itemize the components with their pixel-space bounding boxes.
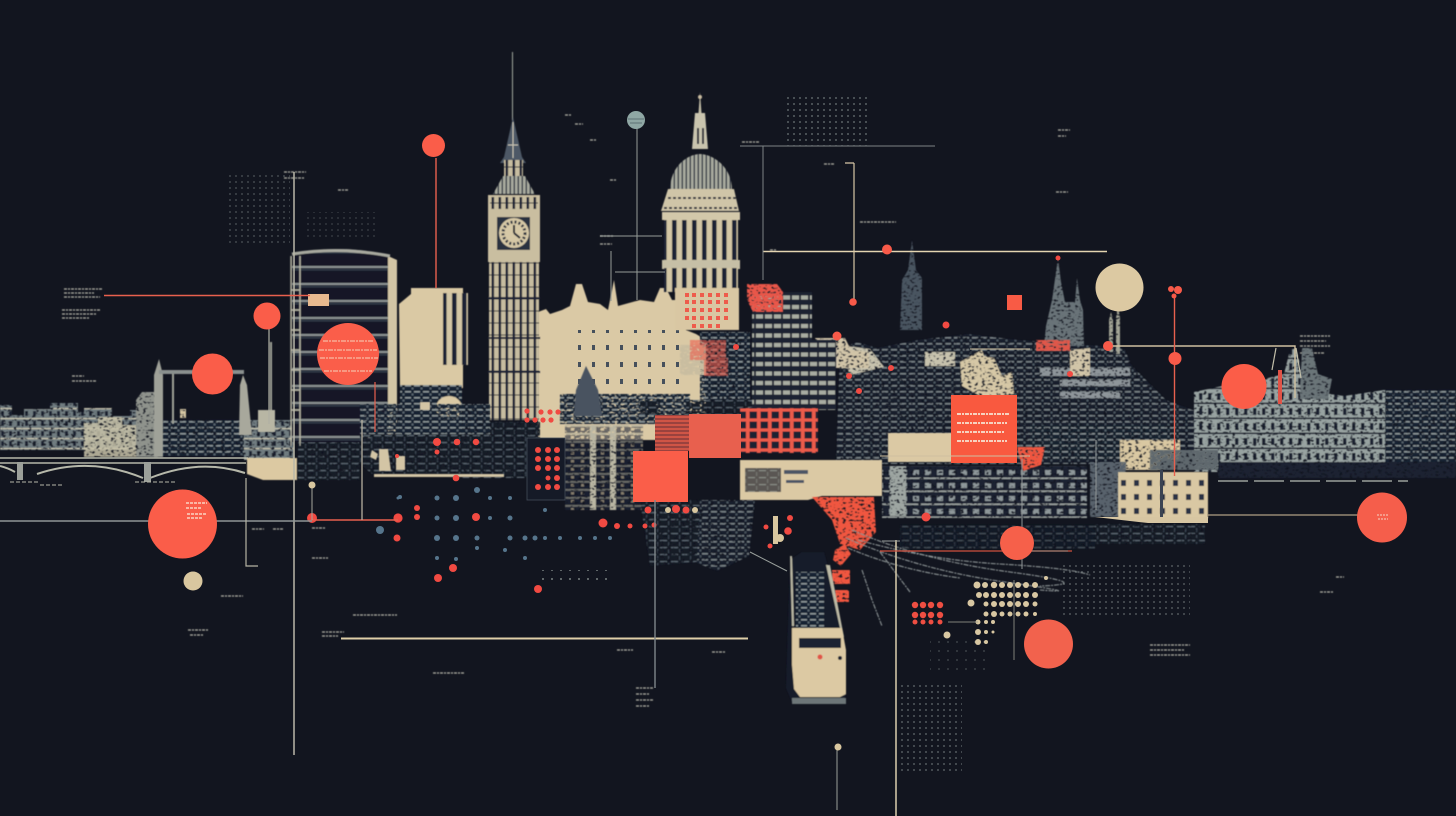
circle: coral far-right marker <box>1357 492 1407 542</box>
circle: coral lower marker <box>1024 620 1073 668</box>
red grid building <box>740 408 818 453</box>
cream embankment block <box>247 458 297 480</box>
red roof strip <box>1036 340 1070 351</box>
scattered data dots <box>307 256 1073 593</box>
circle: grey-blue top pin <box>627 111 645 129</box>
circle: small cream riverside node <box>308 482 316 488</box>
striped mid-rise block <box>752 292 836 410</box>
circle: coral tower bridge marker <box>192 354 233 394</box>
circle: coral left tower marker <box>254 302 280 330</box>
coral small square <box>1007 295 1022 310</box>
circle: small cream marker <box>184 572 202 590</box>
river bridge and arches <box>0 458 248 485</box>
circle: coral palace marker <box>1222 364 1266 409</box>
coral rough roof <box>747 284 783 312</box>
central cream palace <box>538 280 750 440</box>
circle: coral top pin <box>422 134 445 157</box>
cream ground slab centre <box>740 433 952 500</box>
blue-grey matrix dots <box>376 487 612 561</box>
cream high-rise <box>399 288 468 435</box>
st paul's dome <box>661 92 740 330</box>
dark central city mass <box>360 334 1198 571</box>
leader lines <box>0 128 1358 816</box>
cream base band <box>1095 517 1208 523</box>
circle: large coral river marker <box>148 490 217 558</box>
cream embankment line and rubble at centre-left <box>370 402 504 477</box>
coral note panel with caption marks <box>951 395 1017 463</box>
coral dot grid on dome base <box>685 293 728 376</box>
circle: coral rail marker <box>1000 526 1034 560</box>
circle: coral tower marker <box>317 323 379 385</box>
small coral nodes on lines <box>832 244 1182 365</box>
left riverside buildings <box>0 392 360 480</box>
halftone dot fields <box>228 96 1190 772</box>
cream dot matrix <box>944 576 1048 645</box>
gothic spire centre right <box>900 240 922 330</box>
far right palace <box>1194 348 1456 481</box>
small pale annotation block on tower <box>308 294 329 306</box>
spire and belfry <box>493 117 535 194</box>
rail track fan <box>846 530 1090 626</box>
coral dot grid central block <box>524 408 565 500</box>
big ben clock tower <box>488 52 540 420</box>
tall curved glass tower <box>291 249 397 446</box>
clock block <box>488 195 540 262</box>
coral splash around rail junction <box>812 447 1045 602</box>
cream marker chips <box>665 507 784 544</box>
small cream node bottom <box>834 744 842 750</box>
gothic towers right <box>1044 258 1120 354</box>
illegible micro annotations (rendered as fine tick marks) <box>62 115 1391 706</box>
tower bridge <box>154 342 275 457</box>
dim red building <box>655 415 689 451</box>
ship / train silhouette <box>786 552 846 704</box>
circle: large cream marker <box>1096 264 1144 312</box>
tower shaft <box>489 262 539 420</box>
right lower buildings <box>882 450 1218 549</box>
coral dot matrix lower <box>912 602 943 624</box>
coral panel muted <box>689 414 741 458</box>
coral square lower <box>633 451 688 502</box>
